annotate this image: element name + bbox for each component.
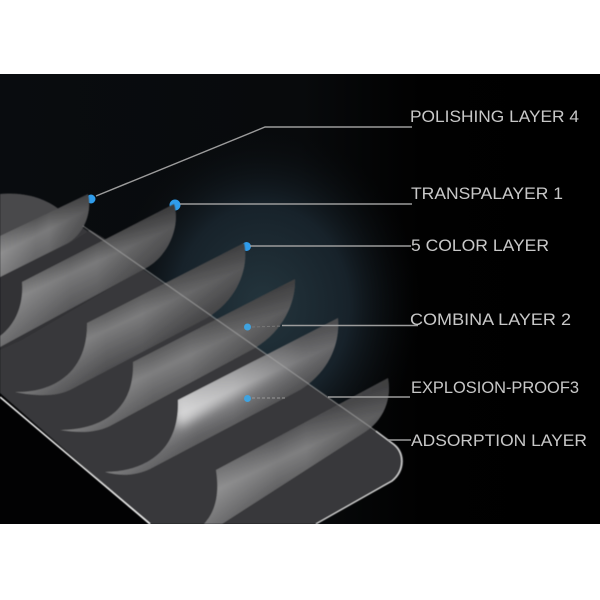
blue marker dots on sheets bbox=[244, 324, 251, 402]
layer labels bbox=[410, 108, 587, 450]
layer labels: COMBINA LAYER 2 bbox=[410, 311, 571, 329]
darker undersides bbox=[20, 230, 106, 300]
layer labels: 5 COLOR LAYER bbox=[411, 237, 549, 255]
dark background panel bbox=[0, 74, 600, 524]
glass bottom-left edge bbox=[0, 397, 150, 524]
layer curl 3 bbox=[15, 243, 245, 395]
layered glass sheets bbox=[0, 194, 403, 524]
layer curl 4 bbox=[60, 279, 295, 432]
blue tip markers behind the curls bbox=[86, 194, 251, 251]
layer curl 5 bbox=[105, 318, 338, 475]
back rounded sheet bbox=[0, 193, 58, 236]
layer curl 2 bbox=[0, 204, 176, 347]
glass edge bbox=[83, 226, 376, 431]
leader lines bbox=[96, 127, 418, 440]
layer labels: EXPLOSION-PROOF3 bbox=[411, 379, 579, 397]
layer curl 6 bbox=[204, 378, 389, 524]
base glass sheet bbox=[0, 228, 404, 524]
layer labels: TRANSPALAYER 1 bbox=[411, 185, 563, 203]
layer curl 1 bbox=[0, 194, 89, 277]
layer labels: ADSORPTION LAYER bbox=[411, 432, 587, 450]
infographic: screen protector layers bbox=[0, 74, 600, 524]
glass bottom-right corner bbox=[316, 431, 402, 524]
layer labels: POLISHING LAYER 4 bbox=[410, 108, 579, 126]
